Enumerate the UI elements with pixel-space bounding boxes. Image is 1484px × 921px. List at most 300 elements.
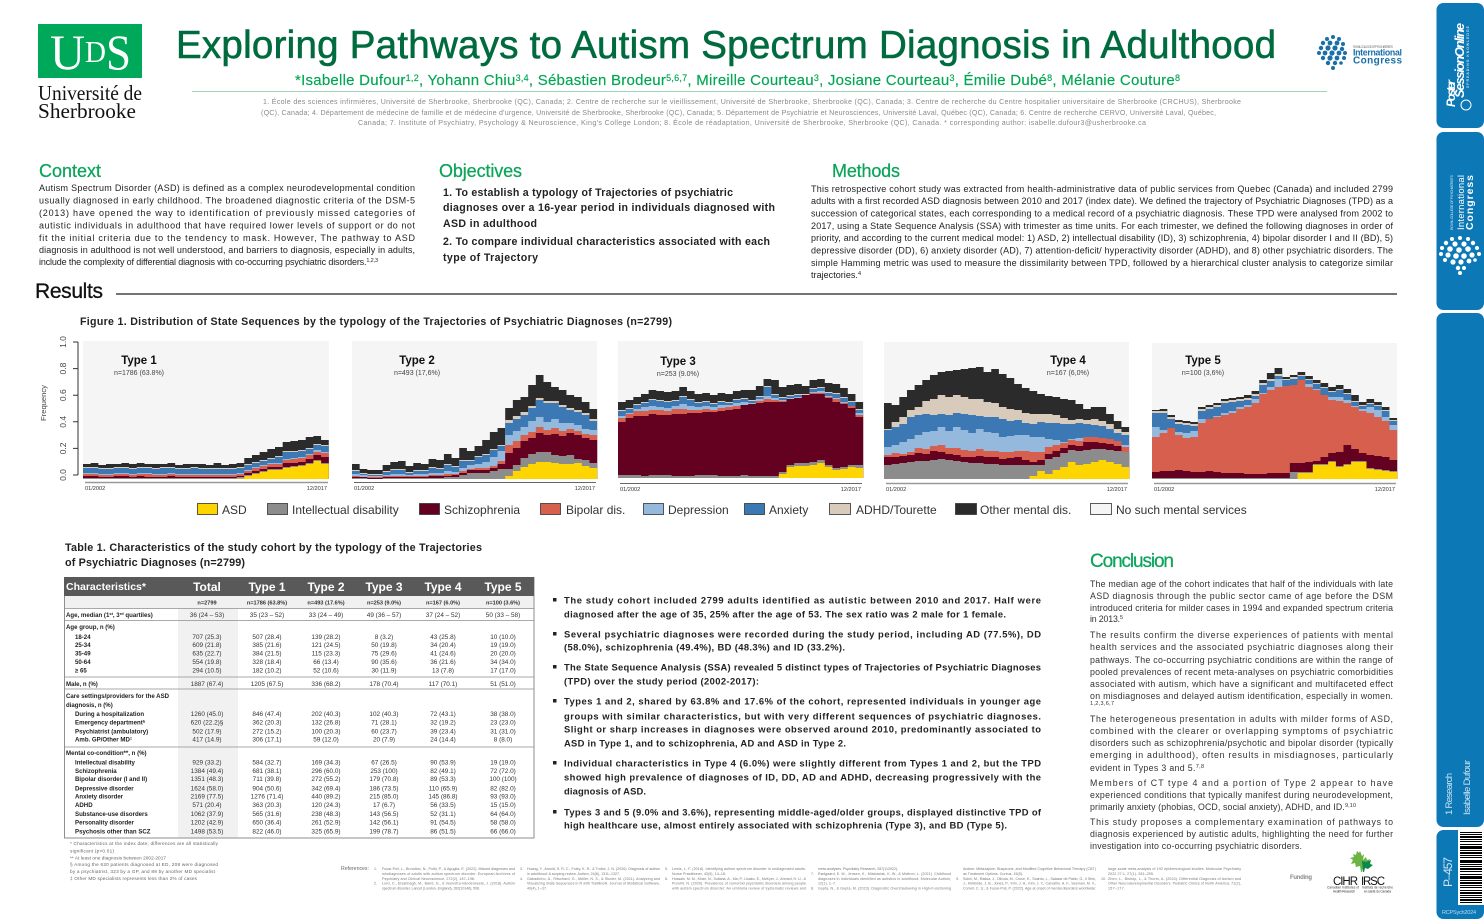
table row: median age: 37 (24 – 52) <box>426 612 460 619</box>
table rows: care settings: 306 (17.1) <box>252 736 282 744</box>
table rows: age group: 36 (21.6) <box>430 659 456 666</box>
logo: Royal College of Psychiatrists International Congress <box>1317 35 1402 70</box>
text block: objectives: 1. To establish a typology of Trajectories of psychiatric <box>443 187 733 199</box>
table rows: mental co-condition: 93 (93.0) <box>490 794 516 800</box>
results key findings list <box>553 594 1042 830</box>
table row: male: 336 (68.2) <box>311 681 341 688</box>
chart: type 5: 12/2017 <box>1375 487 1395 493</box>
authors: , Yohann Chiu <box>419 72 515 89</box>
table rows: age group: 52 (10.6) <box>313 668 339 674</box>
logo: Royal College of Psychiatrists International Congress: Congress <box>1353 56 1402 66</box>
y axis: frequency: Frequency <box>39 385 48 421</box>
table row: median age: rd <box>120 611 124 616</box>
chart: type 2 <box>352 341 597 492</box>
table rows: mental co-condition: 571 (20.4) <box>192 802 222 809</box>
text block: methods <box>811 184 1393 280</box>
references: 12(1), 1–7. <box>818 882 836 886</box>
table rows: mental co-condition: 363 (20.3) <box>252 802 282 809</box>
table header: Type 5 <box>484 580 522 594</box>
table rows: age group: 328 (18.4) <box>252 659 282 666</box>
results key findings list: diagnosed after the age of 35, 25% after the age of 53. The sex ratio was 2 male for 1 female. <box>564 608 1006 620</box>
table rows: care settings: 31 (31.0) <box>490 728 516 736</box>
references: large-scale meta-analysis of 192 epidemiological studies. Molecular Psychiatry <box>1108 867 1241 871</box>
authors: 8 <box>1047 73 1052 83</box>
table header: Total <box>193 580 221 594</box>
table title <box>65 542 482 569</box>
chart: type 5: Type 5 <box>1185 355 1221 367</box>
table rows: age group: 13 (7.8) <box>432 668 454 674</box>
table rows: age group: 17 (17.0) <box>490 668 516 674</box>
text block: methods: 4 <box>858 271 861 277</box>
table header: Type 2 <box>307 580 345 594</box>
table footnotes: § Among the 620 patients diagnosed at ED, 208 were diagnosed <box>70 862 218 867</box>
y axis: frequency: 0.0 <box>58 469 68 481</box>
results key findings list: The State Sequence Analysis (SSA) revealed 5 distinct types of Trajectories of Psychiatric Diagnoses <box>564 662 1041 672</box>
table rows: mental co-condition: ADHD <box>75 802 93 809</box>
table rows: care settings: 71 (28.1) <box>371 720 397 726</box>
table rows: mental co-condition: 66 (66.0) <box>490 828 516 836</box>
references: in adulthood: A scoping review. Autism, 24(6), 1311–1327. <box>527 872 620 876</box>
table: cohort characteristics <box>64 577 534 838</box>
table rows: mental co-condition: 1062 (37.9) <box>191 811 223 818</box>
chart legend: No such mental services <box>1116 503 1247 517</box>
chart: type 1: 12/2017 <box>307 486 327 492</box>
panel: methods <box>811 161 1393 280</box>
table row: male <box>66 681 516 688</box>
affiliations: (QC), Canada; 4. Département de médecine de famille et de médecine d'urgence, Université de Sherbrooke, Sherbrooke (QC), Canada; 5. Département de Psychiatrie et Neurosciences, Université Laval, Québec (QC), Canada; 6. Centre de recherche CERVO, Université Laval, Québec, <box>261 109 1216 117</box>
table footnotes: by a psychiatrist, 323 by a GP, and 89 by another MD specialist <box>70 869 216 874</box>
table rows: mental co-condition: Mental co-condition**, n (%) <box>66 750 147 757</box>
table rows: mental co-condition: 90 (53.9) <box>430 760 456 766</box>
table row: median age <box>66 611 520 619</box>
text block: methods: adults with a first recorded ASD diagnosis between 2010 and 2017 (index date). We defined the trajectory of Psychiatric Diagnoses (TPD) as a <box>811 196 1393 206</box>
table rows: care settings: 620 (22.2)§ <box>191 720 224 726</box>
references: Lord, C., Elsabbagh, M., Baird, G., & Veenstra-Vanderweele, J. (2018). Autism <box>382 882 515 886</box>
table rows: mental co-condition: 17 (6.7) <box>373 802 395 809</box>
chart legend <box>198 503 1247 517</box>
table rows: mental co-condition: Personality disorder <box>75 820 135 826</box>
table rows: care settings: 132 (26.8) <box>311 720 341 726</box>
chart legend: Intellectual disability <box>292 503 399 517</box>
text block: objectives: ASD in adulthood <box>443 218 537 230</box>
text block: conclusion: 1,2,3,6,7 <box>1090 701 1114 707</box>
table rows: mental co-condition: 711 (39.8) <box>253 776 281 783</box>
table rows: age group: 294 (10.5) <box>192 668 222 674</box>
table rows: care settings: 202 (40.3) <box>311 711 341 718</box>
table row: median age: 36 (24 – 53) <box>190 612 224 619</box>
text block: conclusion: combined with the clearer or overlapping symptoms of psychiatric <box>1090 726 1394 736</box>
chart legend: Depression <box>668 503 729 517</box>
table rows: mental co-condition: 296 (60.0) <box>311 768 341 775</box>
table rows: age group: 554 (19.8) <box>192 659 222 666</box>
text block: conclusion: The results confirm the diverse experiences of patients with mental <box>1090 630 1393 640</box>
table rows: care settings: 60 (23.7) <box>371 728 397 736</box>
table rows: care settings: Care settings/providers for the ASD <box>66 693 170 700</box>
references: 40(4), 1–37. <box>527 886 547 890</box>
text block: conclusion: evident in Types 3 and 5. <box>1090 763 1195 773</box>
table rows: mental co-condition: 650 (36.4) <box>252 820 282 826</box>
text block: methods: depressive disorder (DD), 6) anxiety disorder (AD), 7) attention-deficit/ hyperactivity disorder (ADHD), and 8) other psychiatric disorders. The <box>811 246 1393 256</box>
affiliations: Canada; 7. Institute of Psychiatry, Psychology & Neuroscience, King's College London; 8. École de réadaptation, Université de Sherbrooke, Sherbrooke (QC), Canada. * corresponding author: isabelle.dufour3@usherbrooke.ca <box>358 118 1146 127</box>
results key findings list: groups with similar characteristics, but with very different sequences of psychiatric diagnoses. <box>564 710 1041 722</box>
table row: median age: 33 (24 – 49) <box>309 612 343 619</box>
table rows: mental co-condition: 67 (26.5) <box>371 760 397 766</box>
table rows: mental co-condition: Psychosis other than SCZ <box>75 828 151 836</box>
chart: type 5: n=100 (3,6%) <box>1182 370 1224 377</box>
table rows: mental co-condition: 1351 (48.3) <box>191 776 223 783</box>
references: diagnoses in individuals identified as autistics in adulthood. Molecular Autism, <box>818 877 951 881</box>
table rows: mental co-condition: 145 (86.8) <box>428 794 458 800</box>
logo: Université de Sherbrooke: Université de <box>38 81 142 105</box>
table title: of Psychiatric Diagnoses (n=2799) <box>65 557 245 569</box>
text block: conclusion: pooled prevalences of recent meta-analyses on psychiatric comorbidities <box>1090 667 1394 677</box>
table header: Characteristics* <box>66 581 147 593</box>
table rows: age group: 121 (24.5) <box>311 642 341 649</box>
references: Visualizing State Sequences in R with TraMineR. Journal of Statistical Software, <box>527 882 660 886</box>
table rows: age group: 41 (24.6) <box>430 650 456 658</box>
references: 7. <box>811 872 814 876</box>
table rows: mental co-condition: 440 (89.2) <box>311 794 341 800</box>
text block: conclusion <box>1090 579 1394 851</box>
logo: Royal College of Psychiatrists International Congress: ROYAL COLLEGE OF PSYCHIATRISTS <box>1353 45 1393 49</box>
table rows: mental co-condition <box>66 750 517 836</box>
references: 2022 27:1, 27(1), 281–295. <box>1108 872 1154 876</box>
references: 9. <box>956 877 959 881</box>
table rows: care settings: 38 (38.0) <box>490 711 516 718</box>
text block: objectives: 2. To compare individual characteristics associated with each <box>443 236 770 248</box>
table footnotes: ** At least one diagnosis between 2002-2017 <box>70 856 166 860</box>
table rows: age group: 50-64 <box>75 659 91 666</box>
table rows: age group: 18-24 <box>75 634 91 641</box>
table rows: mental co-condition: 86 (51.5) <box>430 828 456 836</box>
authors: *Isabelle Dufour <box>295 72 405 89</box>
table rows: mental co-condition: 52 (31.1) <box>430 811 456 818</box>
results key findings list: (TPD) over the study period (2002-2017): <box>564 676 759 686</box>
logo: Université de Sherbrooke: Sherbrooke <box>38 99 136 123</box>
table rows: mental co-condition: 253 (100) <box>370 768 398 775</box>
results key findings list: showed high prevalence of diagnoses of ID, DD, AD and ADHD, decreasing progressively with the <box>564 772 1041 782</box>
table rows: care settings: 8 (8.0) <box>494 736 512 744</box>
chart: type 5: 01/2002 <box>1154 487 1174 493</box>
chart: type 1: n=1786 (63.8%) <box>114 370 164 377</box>
table rows: mental co-condition: 2169 (77.5) <box>191 794 223 800</box>
table header <box>64 577 534 596</box>
text block: methods: 2017, using a State Sequence Analysis (SSA) with trimester as time units. For each trimester, we defined the following diagnoses in order of <box>811 221 1393 231</box>
table rows: mental co-condition: Substance-use disorders <box>75 811 148 818</box>
table header: Type 4 <box>424 580 462 594</box>
table rows: age group <box>66 624 516 674</box>
side panel: Poster Session Online: SPREADING KNOWLEDGE <box>1466 25 1470 88</box>
table rows: care settings: 23 (23.0) <box>490 720 516 726</box>
table rows: age group: 182 (10.2) <box>252 668 282 674</box>
table footnotes <box>70 841 219 881</box>
chart: type 4: 01/2002 <box>886 487 906 493</box>
text block: conclusion: on misdiagnoses and delayed autism identification, especially in women. <box>1090 691 1393 701</box>
text block: context: autistic individuals in adulthood that have required lower levels of support or do not <box>39 220 415 230</box>
table rows: mental co-condition: 56 (33.5) <box>430 802 456 809</box>
side panel: session and presenter <box>1436 313 1484 827</box>
references: meta-analyses. Psychiatry Research, 287(112922). <box>818 867 898 871</box>
table row: male: Male, n (%) <box>66 681 98 688</box>
table rows: care settings <box>66 693 516 744</box>
table rows: care settings: 417 (14.9) <box>192 736 222 744</box>
chart: type 3 <box>618 341 863 493</box>
chart legend: Bipolar dis. <box>566 503 625 517</box>
table footnotes: * Characteristics at the index date; differences are all statistically <box>70 841 219 846</box>
results key findings list: Individual characteristics in Type 4 (6.0%) were slightly different from Types 1 and 2, but the TPD <box>564 758 1041 768</box>
references: Fusar-Poli, L., Brondino, N., Politi, P., & Aguglia, E. (2022). Missed diagnoses and <box>382 867 515 871</box>
table rows: age group: 50 (19.8) <box>371 642 397 649</box>
table rows: care settings: 24 (14.4) <box>430 736 456 744</box>
table rows: mental co-condition: 261 (52.9) <box>311 820 341 826</box>
table rows: mental co-condition: Depressive disorder <box>75 786 134 792</box>
references: misdiagnoses of adults with autism spectrum disorder. European Archives of <box>382 872 515 876</box>
references: Zhen, L., Bishop, L., & Thurm, A. (2024). Differential Diagnosis of Autism and <box>1108 877 1241 881</box>
table rows: age group: 66 (13.4) <box>313 659 339 666</box>
chart: type 2: 01/2002 <box>354 486 374 492</box>
chart legend: Other mental dis. <box>980 503 1071 517</box>
table header: Type 1 <box>248 580 286 594</box>
table row: male: 117 (70.1) <box>429 681 457 688</box>
table rows: care settings: § <box>143 718 146 724</box>
chart: type 1: Type 1 <box>121 355 157 367</box>
table rows: mental co-condition: 186 (73.5) <box>369 786 399 792</box>
table rows: mental co-condition: 110 (65.9) <box>429 786 457 792</box>
table rows: age group: 30 (11.9) <box>371 668 397 674</box>
text block: objectives: type of Trajectory <box>443 252 538 264</box>
side panel: session and presenter: Isabelle Dufour <box>1462 760 1473 815</box>
chart: type 3: 12/2017 <box>841 487 861 493</box>
authors: , Mireille Courteau <box>687 72 814 89</box>
table rows: age group: 115 (23.3) <box>312 650 340 658</box>
chart: type 4: n=167 (6,0%) <box>1047 370 1089 377</box>
chart: type 2: n=493 (17,6%) <box>394 370 440 377</box>
funding label: Funding <box>1290 875 1312 881</box>
authors: 5,6,7 <box>666 73 687 83</box>
table rows: age group: 35-49 <box>75 650 91 658</box>
references: Other Neurodevelopmental Disorders. Pediatric Clinics of North America, 71(2), <box>1108 882 1241 886</box>
table rows: mental co-condition: 64 (64.0) <box>490 811 516 818</box>
table rows: age group: 10 (10.0) <box>490 634 516 641</box>
table row: male: 51 (51.0) <box>490 681 516 688</box>
chart: type 3: Type 3 <box>660 356 696 368</box>
references: J., Kirkbride, J. B., Jones, P., Kim, J. H., Kim, J. Y., Carvalho, A. F., Seeman, M. V., <box>963 882 1096 886</box>
results key findings list: Several psychiatric diagnoses were recorded during the study period, including AD (77.5%), DD <box>564 628 1041 640</box>
table rows: mental co-condition: 82 (82.0) <box>490 786 516 792</box>
table rows: age group: 635 (22.7) <box>192 650 222 658</box>
table rows: mental co-condition: 565 (31.6) <box>252 811 282 818</box>
table rows: age group: 707 (25.3) <box>192 634 222 641</box>
heading: conclusion: Conclusion <box>1090 551 1174 572</box>
logo: CIHR IRSC: IRSC <box>1361 876 1385 888</box>
table rows: age group: 8 (3.2) <box>375 634 393 641</box>
table row: median age: quartiles) <box>124 612 153 619</box>
text block: conclusion: diagnosis experienced by autistic adults, highlighting the need for further <box>1090 829 1393 839</box>
text block: conclusion: Members of CT type 4 and a portion of Type 2 appear to have <box>1090 778 1393 788</box>
references: 2. <box>374 882 377 886</box>
text block: methods: succession of categorical states, each corresponding to a medical record of a psychiatric diagnosis. These TPD were analysed from 2002 to <box>811 208 1393 218</box>
table rows: mental co-condition: 904 (50.6) <box>252 786 282 792</box>
side panel: Poster Session Online: Poster <box>1444 79 1458 107</box>
table rows: age group: 609 (21.8) <box>192 642 222 649</box>
text block: conclusion: The median age of the cohort indicates that half of the individuals with late <box>1090 579 1393 589</box>
text block: context: 1,2,3 <box>366 258 378 264</box>
authors: 3,4 <box>516 73 529 83</box>
table rows: mental co-condition: 143 (56.5) <box>369 811 399 818</box>
text block: conclusion: in 2013. <box>1090 614 1120 624</box>
references: Lewis, L. F. (2018). Identifying autism spectrum disorder in undiagnosed adults. <box>672 867 806 871</box>
text block: conclusion: investigation into co-occurring psychiatric disorders. <box>1090 841 1302 851</box>
chart: type 4: 12/2017 <box>1107 487 1127 493</box>
table rows: care settings: 39 (23.4) <box>430 728 456 736</box>
references: 10. <box>1101 877 1106 881</box>
references: 157–177. <box>1108 886 1125 890</box>
table title: Table 1. Characteristics of the study cohort by the typology of the Trajectories <box>65 542 482 554</box>
side panel: International Congress: ROYAL COLLEGE OF PSYCHIATRISTS <box>1450 174 1454 230</box>
table rows: mental co-condition: Anxiety disorder <box>75 794 124 800</box>
logo: Université de Sherbrooke: S <box>106 24 131 80</box>
table rows: age group: 20 (20.0) <box>490 650 516 658</box>
table rows: mental co-condition: 822 (46.0) <box>252 828 282 836</box>
text block: objectives <box>443 187 775 264</box>
authors: , Josiane Courteau <box>819 72 949 89</box>
table rows: care settings: 100 (20.3) <box>311 728 341 736</box>
references: Autism: Mirtazapine, Buspirone, and Modified Cognitive Behavioral Therapy (CBT) <box>963 867 1096 871</box>
text block: methods: This retrospective cohort study was extracted from health-administrative data of public services from Quebec (Canada) and included 2799 <box>811 184 1393 194</box>
text block: context <box>39 183 416 267</box>
table rows: care settings: Emergency department <box>75 720 143 726</box>
references: 8. <box>811 886 814 890</box>
side panel: International Congress <box>1436 132 1484 310</box>
references: 1. <box>374 867 377 871</box>
table rows: mental co-condition: 179 (70.8) <box>369 776 399 783</box>
table row: male: 178 (70.4) <box>369 681 399 688</box>
table rows: care settings: 362 (20.3) <box>252 720 282 726</box>
table rows: care settings: 59 (12.0) <box>313 736 339 744</box>
table rows: mental co-condition: Schizophrenia <box>75 768 117 775</box>
text block: conclusion: 7,8 <box>1196 764 1204 770</box>
table row: sample sizes: n=100 (3.6%) <box>486 600 520 606</box>
references: 6. <box>665 877 668 881</box>
table rows: care settings: Amb. GP/Other MD <box>75 736 130 744</box>
table rows: mental co-condition: 1384 (49.4) <box>191 768 223 775</box>
table rows: age group: ≥ 65 <box>75 668 87 674</box>
text block: objectives: diagnoses over a 16-year period in individuals diagnosed with <box>443 202 775 214</box>
text block: context: include the complexity of differential diagnosis with co-occurring psychiatric disorders. <box>39 257 367 267</box>
panel: conclusion <box>1090 551 1394 851</box>
text block: context: fit the initial criteria due to the tendency to mask. However, The pathway to ASD <box>39 233 416 243</box>
table row: median age: 35 (23 – 52) <box>250 612 284 619</box>
text block: conclusion: health services and the associated psychiatric diagnoses along their <box>1090 642 1393 652</box>
logo: CIHR IRSC: CIHR <box>1333 876 1358 888</box>
results key findings list: diagnosis of ASD. <box>564 786 646 796</box>
table rows: mental co-condition: 1276 (71.4) <box>251 794 283 800</box>
table rows: care settings: 846 (47.4) <box>252 711 282 718</box>
table rows: age group: 25-34 <box>75 642 91 649</box>
side panel: International Congress: Congress <box>1464 175 1476 230</box>
references: 3. <box>520 867 523 871</box>
side panel: Poster Session Online: SessionOnline <box>1452 23 1467 98</box>
authors: 3 <box>949 73 954 83</box>
chart: type 2: Type 2 <box>399 355 435 367</box>
text block: conclusion: disorders such as schizophrenia/psychotic and bipolar disorder (typically <box>1090 738 1394 748</box>
table rows: age group: 384 (21.5) <box>252 650 282 658</box>
logo: Royal College of Psychiatrists International Congress: International <box>1353 48 1402 58</box>
table rows: age group: 43 (25.8) <box>430 634 456 641</box>
chart: type 3: 01/2002 <box>620 487 640 493</box>
references <box>341 866 1241 890</box>
logo: Université de Sherbrooke: D <box>85 34 106 69</box>
table rows: mental co-condition: 929 (33.2) <box>192 760 222 766</box>
text block: conclusion: This study proposes a complementary examination of pathways to <box>1090 817 1393 827</box>
text block: context: usually diagnosed in early childhood. The broadened diagnostic criteria of the DSM-5 <box>39 196 415 206</box>
title: Exploring Pathways to Autism Spectrum Diagnosis in Adulthood <box>176 24 1276 67</box>
table rows: mental co-condition: 272 (55.2) <box>311 776 341 783</box>
logo: Université de Sherbrooke: U <box>50 24 85 80</box>
table row: sample sizes: n=1786 (63.8%) <box>247 600 287 606</box>
table rows: mental co-condition: 681 (38.1) <box>252 768 282 775</box>
authors: , Mélanie Couture <box>1052 72 1175 89</box>
figure title: Figure 1. Distribution of State Sequences by the typology of the Trajectories of Psychiatric Diagnoses (n=2799) <box>80 316 672 328</box>
table rows: mental co-condition: 169 (34.3) <box>311 760 341 766</box>
table row: sample sizes: n=253 (9.0%) <box>367 600 401 606</box>
table row: median age: st <box>109 611 114 616</box>
table rows: care settings: During a hospitalization <box>75 711 144 718</box>
table rows: care settings: 32 (19.2) <box>430 720 456 726</box>
authors: 8 <box>1175 73 1180 83</box>
logo: CIHR IRSC <box>1327 851 1393 894</box>
references: 5. <box>665 867 668 871</box>
text block: methods: trajectories. <box>811 270 858 280</box>
table rows: mental co-condition: 58 (58.0) <box>490 820 516 826</box>
table row: male: 1887 (67.4) <box>191 681 223 688</box>
side panel: International Congress: International <box>1456 175 1467 230</box>
references: Gupta, N., & Gupta, M. (2023). Diagnostic Overshadowing in High-Functioning <box>818 886 951 890</box>
authors: , Sébastien Brodeur <box>529 72 666 89</box>
table header: Type 3 <box>365 580 403 594</box>
side panel: Poster Session Online <box>1436 3 1484 128</box>
affiliations <box>261 97 1241 127</box>
side panel: poster number and barcode <box>1436 830 1484 919</box>
authors: 1,2 <box>406 73 419 83</box>
panel: context <box>39 161 416 267</box>
table rows: mental co-condition: 142 (56.1) <box>369 820 399 826</box>
table rows: mental co-condition: 342 (69.4) <box>311 786 341 792</box>
table rows: age group: 19 (19.0) <box>490 642 516 649</box>
references: spectrum disorder. Lancet (London, England), 392(10146), 508. <box>382 886 480 890</box>
table rows: care settings: ‡ <box>130 736 132 740</box>
heading: results: Results <box>35 280 103 303</box>
table rows: mental co-condition: Intellectual disability <box>75 760 136 766</box>
y axis: frequency <box>39 336 78 481</box>
y axis: frequency: 0.4 <box>58 416 68 428</box>
table rows: mental co-condition: 100 (100) <box>489 776 517 783</box>
text block: conclusion: emerging in adulthood), often results in misdiagnoses, particularly <box>1090 750 1394 760</box>
table rows: care settings: Psychiatrist (ambulatory) <box>75 728 148 736</box>
authors: 3 <box>814 73 819 83</box>
table rows: age group: Age group, n (%) <box>66 624 115 631</box>
table rows: care settings: 20 (7.9) <box>373 736 395 744</box>
text block: context: Autism Spectrum Disorder (ASD) is defined as a complex neurodevelopmental condition <box>39 183 415 193</box>
references: Rødgaard, E. M., Jensen, K., Miskowiak, K. W., & Mottron, L. (2021). Childhood <box>818 872 951 876</box>
table rows: mental co-condition: 120 (24.3) <box>311 802 341 809</box>
text block: conclusion: 5 <box>1120 615 1123 621</box>
text block: methods: priority, and according to the current medical model: 1) ASD, 2) intellectual disability (ID), 3) schizophrenia, 4) bipolar disorder I and II (BD), 5) <box>811 233 1393 243</box>
table rows: mental co-condition: 82 (49.1) <box>430 768 456 775</box>
side panel: session and presenter: 1 Research <box>1444 773 1455 815</box>
chart: type 5 <box>1152 343 1397 493</box>
text block: conclusion: associated with autism, which have a significant and multifaceted effect <box>1090 679 1394 689</box>
